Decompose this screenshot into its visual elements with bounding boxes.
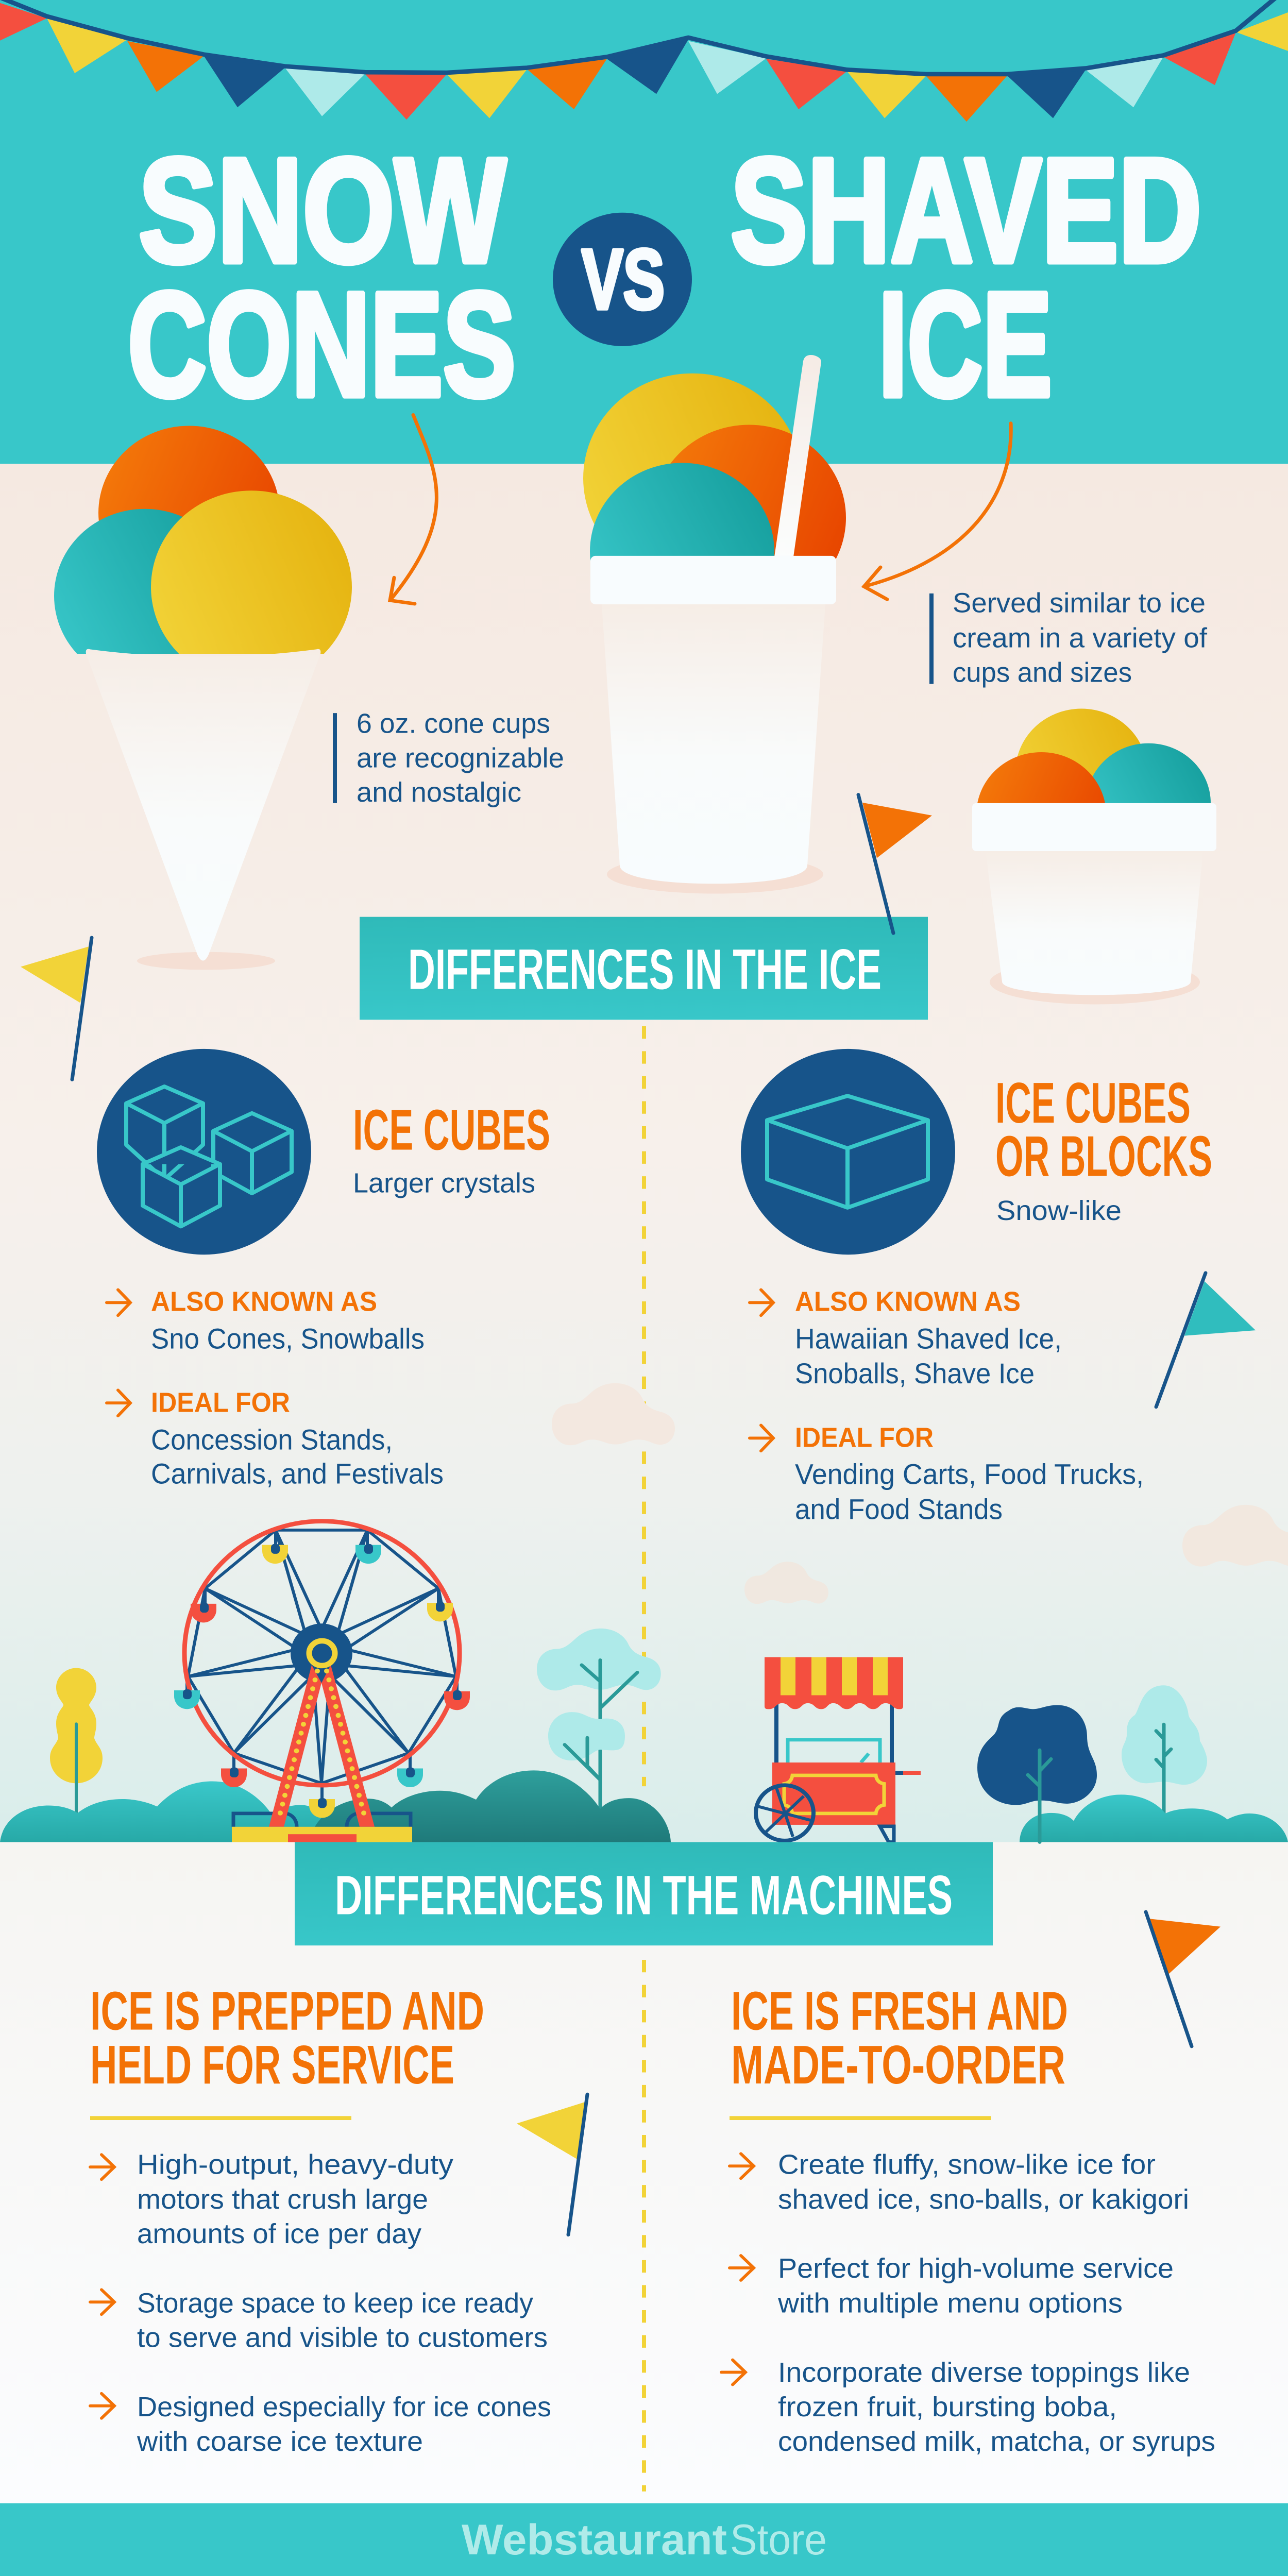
support legs	[269, 1665, 321, 1827]
banner: differences in the ice: DIFFERENCES IN THE ICE	[408, 938, 882, 1001]
right column: also known as: ALSO KNOWN AS	[795, 1286, 1021, 1317]
left bullet 2: to serve and visible to customers	[137, 2322, 548, 2353]
right bullet 3: condensed milk, matcha, or syrups	[778, 2426, 1215, 2457]
wheel frame	[187, 1530, 457, 1801]
arrow: to cup	[864, 423, 1011, 599]
navy tree	[977, 1705, 1097, 1805]
right column: also known as: Hawaiian Shaved Ice,	[795, 1324, 1062, 1355]
right bullet 1: Create fluffy, snow-like ice for	[778, 2149, 1156, 2180]
yellow tree	[50, 1668, 103, 1814]
callout: cone cups	[333, 708, 564, 808]
flag: orange top	[858, 795, 932, 933]
bunting	[0, 0, 1288, 122]
left column: also known as: ALSO KNOWN AS	[151, 1286, 377, 1317]
heading: ice cubes	[353, 1098, 550, 1198]
hills: left teal	[0, 1781, 330, 1842]
right column: ideal for	[750, 1422, 1144, 1526]
left bullet 3: with coarse ice texture	[137, 2426, 423, 2457]
heading: ice cubes: ICE CUBES	[353, 1098, 550, 1162]
left bullet 1: High-output, heavy-duty	[137, 2149, 454, 2180]
banner: differences in the machines: DIFFERENCES IN THE MACHINES	[335, 1865, 953, 1926]
small shaved ice cup	[972, 709, 1216, 1005]
ferris wheel	[174, 1521, 470, 1842]
heading: prepped: ICE IS PREPPED AND	[90, 1980, 484, 2041]
left bullet 1: motors that crush large	[137, 2183, 428, 2215]
flag: orange lower	[1146, 1912, 1221, 2046]
footer: Webstaurant	[462, 2516, 727, 2564]
right bullet 1	[730, 2149, 1189, 2215]
right bullet 2: Perfect for high-volume service	[778, 2252, 1174, 2284]
left bullet 3	[90, 2391, 551, 2457]
base	[232, 1827, 412, 1842]
vs badge: VS	[582, 231, 665, 327]
right bullet 1: shaved ice, sno-balls, or kakigori	[778, 2183, 1189, 2215]
title: snow cones: SNOW	[139, 128, 507, 293]
gondolas	[174, 1544, 470, 1818]
heading: fresh: MADE-TO-ORDER	[731, 2034, 1065, 2095]
left bullet 1	[90, 2149, 454, 2249]
light tree right	[1122, 1685, 1207, 1785]
hills: left dark	[315, 1770, 671, 1842]
right column: ideal for: Vending Carts, Food Trucks,	[795, 1459, 1144, 1490]
left column: ideal for: Carnivals, and Festivals	[151, 1459, 444, 1490]
cloud: cart	[744, 1562, 828, 1604]
railings	[233, 1814, 411, 1827]
light blue tree beside wheel	[537, 1629, 661, 1810]
callout: cone cups: 6 oz. cone cups	[357, 708, 550, 739]
title: shaved ice	[731, 128, 1201, 428]
flag: teal right	[1156, 1273, 1256, 1407]
navy tree trunk	[1028, 1750, 1051, 1842]
icon: large ice block	[741, 1049, 955, 1255]
footer: Store	[730, 2516, 827, 2564]
title: shaved ice: ICE	[878, 262, 1052, 428]
food cart	[756, 1657, 921, 1842]
right bullet 2: with multiple menu options	[777, 2287, 1123, 2318]
cloud: center	[552, 1383, 675, 1445]
title: snow cones	[128, 128, 516, 428]
heading: prepped: HELD FOR SERVICE	[90, 2034, 454, 2095]
snow cone illustration	[54, 426, 352, 970]
flag: yellow lower	[517, 2094, 587, 2235]
heading: ice cubes or blocks: Snow-like	[996, 1195, 1122, 1226]
tall shaved ice cup	[583, 355, 846, 893]
heading: ice cubes or blocks	[995, 1071, 1212, 1226]
left column: also known as	[107, 1286, 425, 1355]
right column: also known as	[750, 1286, 1062, 1390]
left column: ideal for: Concession Stands,	[151, 1424, 393, 1456]
left bullet 2: Storage space to keep ice ready	[137, 2287, 534, 2318]
header background	[0, 0, 1288, 464]
left bullet 1: amounts of ice per day	[137, 2218, 422, 2249]
callout: cone cups: are recognizable	[357, 742, 564, 773]
left column: ideal for	[107, 1386, 444, 1490]
flag: yellow left	[21, 938, 92, 1079]
right column: also known as: Snoballs, Shave Ice	[795, 1358, 1035, 1390]
heading: fresh: ICE IS FRESH AND	[731, 1980, 1068, 2041]
vs badge	[553, 213, 692, 346]
banner: differences in the machines	[295, 1842, 993, 1945]
cloud: right	[1182, 1505, 1288, 1567]
tree trunks right	[1156, 1724, 1171, 1815]
right bullet 3: frozen fruit, bursting boba,	[778, 2391, 1117, 2422]
title: snow cones: CONES	[128, 262, 516, 428]
heading: prepped	[90, 1980, 484, 2120]
arrow: to cone	[390, 415, 436, 604]
center divider: upper	[642, 1026, 646, 1786]
right bullet 2	[730, 2252, 1174, 2318]
left bullet 3: Designed especially for ice cones	[137, 2391, 551, 2422]
hills: right teal	[1020, 1794, 1288, 1842]
callout: cups and sizes	[929, 587, 1208, 688]
center divider: lower	[642, 1960, 646, 2492]
heading: fresh	[730, 1980, 1068, 2120]
right bullet 3: Incorporate diverse toppings like	[778, 2357, 1190, 2388]
upper section background	[0, 464, 1288, 1842]
left bullet 2	[90, 2287, 548, 2353]
right bullet 3	[721, 2357, 1215, 2457]
callout: cups and sizes: Served similar to ice	[953, 587, 1206, 618]
callout: cups and sizes: cream in a variety of	[953, 622, 1208, 653]
footer	[0, 2503, 1288, 2576]
left column: ideal for: IDEAL FOR	[151, 1386, 290, 1418]
right column: ideal for: IDEAL FOR	[795, 1422, 934, 1453]
callout: cups and sizes: cups and sizes	[953, 657, 1132, 688]
right column: ideal for: and Food Stands	[795, 1494, 1003, 1526]
callout: cone cups: and nostalgic	[357, 776, 521, 808]
lower section background	[0, 1842, 1288, 2505]
left column: also known as: Sno Cones, Snowballs	[151, 1324, 425, 1355]
icon: three ice cubes	[97, 1049, 311, 1255]
hub	[291, 1623, 352, 1683]
heading: ice cubes: Larger crystals	[353, 1167, 535, 1198]
banner: differences in the ice	[360, 917, 928, 1020]
